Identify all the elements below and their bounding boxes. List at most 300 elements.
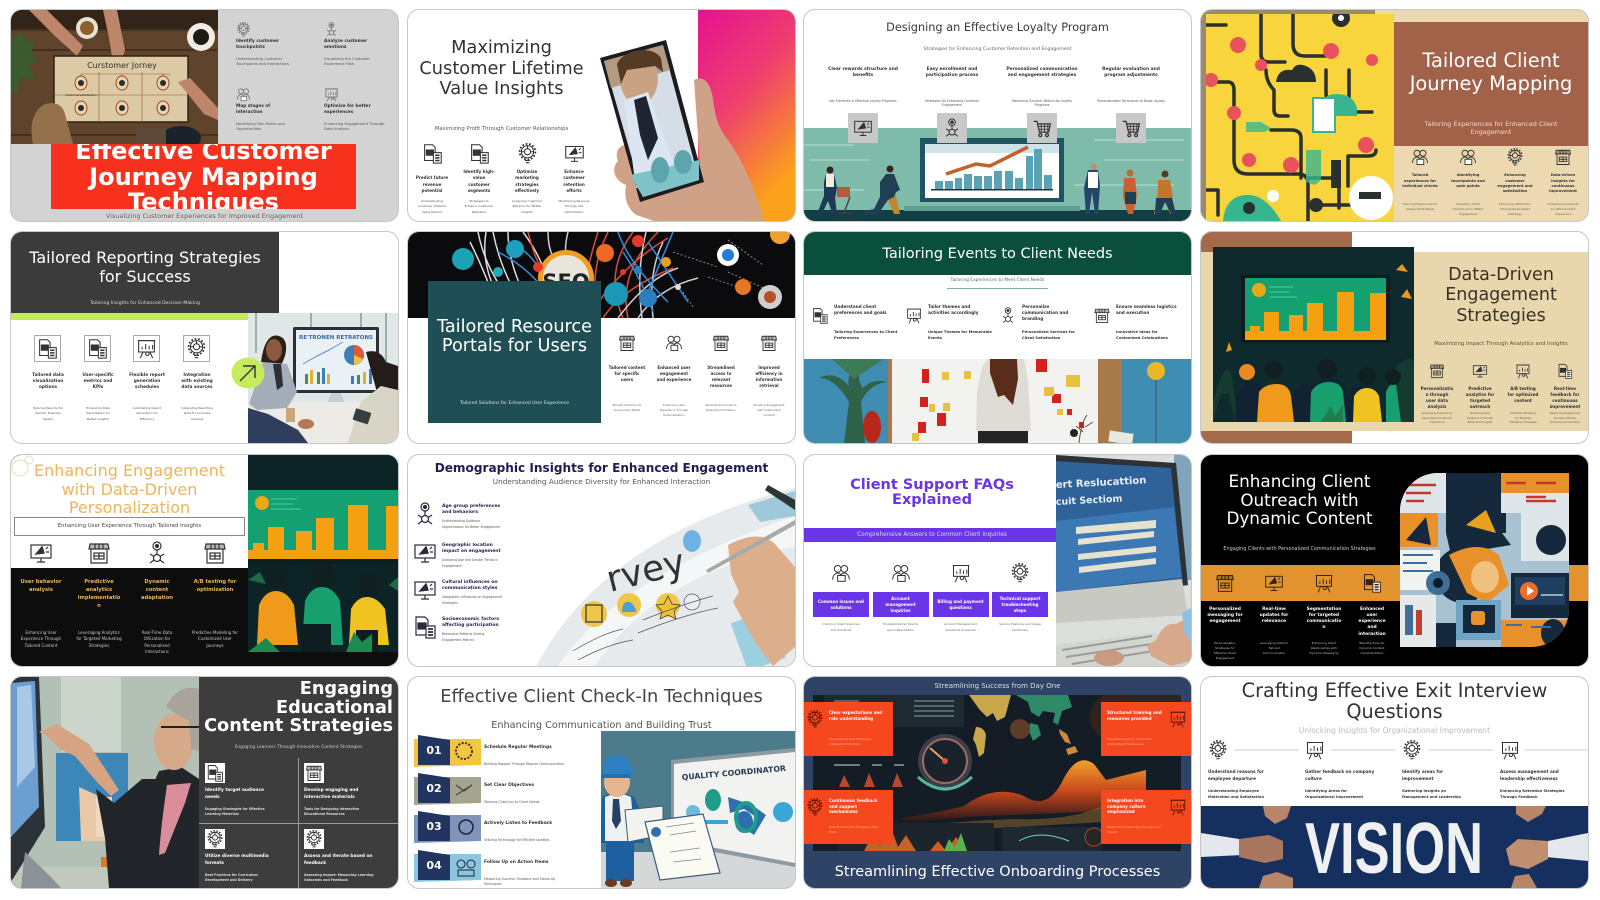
item: metrics: User-specific (82, 373, 114, 378)
item: billing: Billing and payment (937, 598, 984, 604)
grid divider horizontal (199, 822, 398, 825)
item: emotions (324, 22, 370, 66)
item: expectations (804, 702, 893, 756)
item: A/B testing: Journeys (206, 643, 224, 648)
title: with Data-Driven (62, 480, 197, 498)
item: themes: Unique Themes for Memorable (928, 330, 992, 334)
item: stages (236, 88, 285, 131)
item: improvement areas: improvement (1402, 776, 1434, 780)
item: real-time (1251, 573, 1297, 663)
item: rewards: benefits (853, 73, 873, 78)
item: satisfaction (1497, 148, 1533, 216)
item: predictive: Behavioral Insights (1468, 421, 1492, 424)
item: improvement: continuous (1552, 184, 1574, 188)
panel: data-driven personalization slide (11, 455, 398, 666)
item: A/B testing: Predictive Modeling (1510, 412, 1536, 415)
item: optimize: Optimize for better (324, 104, 371, 109)
subtitle: Strategies for Enhancing Customer Retention and Engagement (924, 47, 1072, 52)
item: training: Structured training and (1107, 710, 1162, 715)
item: communication: Personalized communication (1006, 67, 1078, 72)
item: metrics (82, 335, 114, 421)
item: visualization: Needs (43, 417, 53, 421)
item: predictive analytics: Leveraging Analytics (78, 630, 120, 635)
item: engagement (656, 336, 692, 416)
subtitle band (804, 528, 1056, 542)
item: enrollment: Easy enrollment and (927, 67, 977, 72)
item: themes: activities accordingly (928, 310, 978, 315)
item: leadership: Enhancing Retention Strategies (1500, 789, 1564, 793)
item: leadership: leadership effectiveness (1500, 776, 1558, 780)
item: dynamic content (129, 541, 185, 659)
item: optimize: experiences (324, 110, 353, 115)
item: account management: management (885, 602, 916, 606)
item: access (705, 336, 737, 412)
item: predictive (1458, 363, 1502, 438)
item: age groups: Age group preferences (442, 504, 500, 509)
title: Client Support FAQs (850, 476, 1014, 492)
panel: customer lifetime value slide (408, 10, 795, 221)
item: behavior analysis: analysis (29, 587, 53, 593)
photo: support section on computer monitor: ert Reslucattion (1056, 475, 1147, 491)
photo: quality coordinator figure with certificates (601, 731, 795, 888)
item: improvement areas (1402, 740, 1490, 800)
item: segmentation (1301, 573, 1347, 663)
item: continuous feedback: Hires (829, 830, 837, 834)
item: geographic: Analyzing Age and Gender Trends in (442, 558, 498, 562)
item: 04 action items: Measuring Success: Feedback and Follow-Up (484, 877, 555, 881)
item: interactive materials: interactive materials (304, 795, 355, 800)
item: metrics: Enhancing Data (86, 406, 110, 410)
item: culture feedback: Identifying Areas for (1305, 789, 1347, 793)
title: for Success (99, 266, 191, 286)
item: real-time: updates for (1260, 613, 1288, 618)
item: experience (1349, 573, 1395, 663)
item: socioeconomic: Engagement Metrics (442, 638, 474, 642)
title band: Tailoring Events to Client Needs (882, 246, 1113, 262)
item: communication: Programs (1035, 103, 1049, 107)
title: Tailored Resource (437, 317, 592, 337)
item: emotions: Experience Flow (324, 62, 354, 66)
item: behavior analysis: User behavior (21, 579, 61, 585)
item: marketing: Behavior for Better (513, 204, 541, 208)
title: Engaging (300, 679, 393, 699)
item: goals: Tailoring Experiences to Client (834, 330, 897, 334)
panel: tailored reporting slide (11, 232, 398, 443)
title band (804, 232, 1191, 275)
item: touchpoints: Identifying (1457, 173, 1479, 177)
left strip (1201, 10, 1206, 221)
item: satisfaction: Pathways (1508, 212, 1522, 216)
item: integration: data sources (181, 385, 213, 390)
item: stages: Map stages of (236, 104, 270, 109)
item: predictive: outreach (1470, 404, 1490, 409)
item: touchpoints (1451, 150, 1485, 216)
item: efficiency (754, 336, 784, 416)
item: age groups: and behaviors (442, 510, 478, 515)
item: logistics: Ensure seamless logistics (1116, 304, 1177, 309)
item: culture feedback: Organizational Improvement (1305, 795, 1363, 799)
gradient and hand holding phone (600, 10, 795, 221)
subtitle (1424, 120, 1558, 136)
panel: onboarding processes slide (804, 677, 1191, 888)
item: technical support (992, 563, 1048, 633)
item: rewards: Clear rewards structure and (828, 67, 898, 72)
item: touchpoints: touchpoints (236, 45, 265, 50)
subtitle: Engaging Learners Through Innovative Content Strategies (235, 745, 362, 750)
item: evaluation: Personalization Techniques to Boost Loyalty (1097, 99, 1165, 103)
item: predict: revenue (423, 182, 441, 187)
item: predictive analytics: implementatio (78, 595, 120, 601)
item: feedback: Measuring Engagement (1550, 412, 1580, 415)
title (419, 37, 584, 99)
title (1408, 48, 1572, 94)
item: common issues: Common Client Inquiries (822, 622, 860, 626)
photo: customer journey board on a wooden table: Curstomer Jorney (87, 61, 157, 70)
item: stages: Identifying Pain Points and (236, 122, 285, 126)
item: messaging: Engagement (1216, 656, 1234, 660)
item: socioeconomic: Behavioral Patterns Driving (442, 632, 484, 636)
title: Dynamic Content (1226, 508, 1373, 528)
title: Tailored Client (1422, 48, 1560, 72)
illustration: audience and bar chart (248, 455, 398, 652)
item: predictive: analytics for (1466, 392, 1494, 397)
item: integration: Integrating Real-Time (181, 406, 213, 410)
item: metrics: Better Insights (87, 417, 109, 421)
item: billing (932, 563, 988, 633)
item: marketing: strategies (515, 182, 539, 187)
item: experience: interaction (1358, 632, 1386, 636)
item: common issues (813, 563, 869, 633)
item: segments: value (473, 175, 485, 180)
item: cultural: communication styles (442, 586, 497, 591)
item: target audience: needs (205, 795, 220, 800)
item: satisfaction: engagement and (1497, 184, 1533, 188)
item: behavior analysis (13, 541, 69, 659)
title: Portals for Users (442, 336, 587, 356)
title: Tailored Reporting Strategies (29, 248, 261, 267)
item: technical support: Service Features and Usage (999, 622, 1041, 626)
item: interactive materials (304, 763, 394, 817)
item: evaluation: program adjustments (1104, 73, 1158, 78)
item: enrollment (925, 66, 980, 143)
subtitle: Visualizing Customer Experiences for Improved Engagement (106, 212, 303, 220)
item: 04 action items: Follow Up on Action Items (484, 860, 549, 864)
item: A/B testing: content (1514, 398, 1532, 403)
item: logistics: and execution (1116, 310, 1149, 315)
item: account management: inquiries (890, 608, 911, 612)
item: personalization: Personalizatio (1421, 386, 1453, 391)
item: logistics: Innovative Ideas for (1116, 330, 1158, 334)
item: multimedia: Best Practices for Curriculum (205, 872, 258, 876)
item: emotions: Visualizing the Customer (324, 57, 370, 61)
title: Data-Driven (1448, 264, 1554, 284)
panel: loyalty program slide (804, 10, 1191, 221)
item: interactive materials: Educational Resources (304, 812, 345, 816)
item: 03 feedback: 03 (426, 820, 442, 833)
item: satisfaction: Enhancing (1504, 173, 1526, 177)
item: content: Unique User Needs (614, 408, 640, 412)
title: Demographic Insights for Enhanced Engagement (435, 461, 768, 475)
item: culture (1101, 790, 1191, 844)
item: socioeconomic: Socioeconomic factors (442, 617, 499, 622)
item: engagement: Experience Through (660, 408, 688, 412)
title banner (51, 144, 356, 209)
item: schedules: Flexible report (129, 373, 165, 378)
grid divider vertical (297, 758, 300, 888)
item: billing: Account Management (944, 622, 977, 626)
brown accent bottom (1201, 431, 1352, 443)
title (29, 248, 261, 286)
item: goals: Understand client (834, 304, 876, 309)
panel: client support FAQs slide (804, 455, 1191, 666)
item: geographic (413, 541, 508, 583)
illustration: dynamic content collage (1400, 473, 1569, 647)
panel: resource portals slide (408, 232, 795, 443)
item: content: Tailored content (609, 365, 645, 370)
item: predict: Value Metrics (422, 210, 442, 214)
item: retention: efforts (566, 188, 582, 193)
item: engagement: engagement (660, 371, 688, 376)
item: tailored experiences: Tailoring Experiences for (1403, 202, 1437, 206)
item: feedback: feedback for (1550, 392, 1580, 397)
subtitle: Tailored Solutions for Enhanced User Experience (460, 401, 569, 406)
photo: colleagues reviewing dashboard (248, 313, 398, 443)
panel: demographic insights slide (408, 455, 795, 666)
item: segmentation: Relationships with (1311, 646, 1337, 650)
item: integration (181, 335, 213, 421)
item: dynamic content: Utilization for (144, 636, 170, 641)
item: predict: Understanding (421, 199, 443, 203)
item: technical support: steps (1014, 608, 1026, 612)
title (1414, 264, 1588, 326)
item: segments: Identify high- (463, 169, 495, 174)
item: improvement areas: Gathering Insights on (1402, 789, 1446, 793)
item: retention: Enhance (564, 169, 584, 174)
item: visualization: Tailoring Reports for (33, 406, 63, 410)
title: Outreach with (1240, 490, 1359, 510)
item: leadership: Through Feedback (1500, 795, 1537, 799)
item: themes: Tailor themes and (928, 304, 970, 309)
item: cultural: Cultural influences on (442, 580, 498, 585)
item: technical support: Guidelines (1012, 628, 1028, 632)
item: evaluation: Regular evaluation and (1102, 67, 1160, 72)
item: retention: retention (563, 182, 585, 187)
item: experience: Implementation (1361, 650, 1383, 654)
item: schedules: Efficiency (140, 417, 154, 421)
panel: tailored client journey slide (1201, 10, 1588, 221)
item: predictive analytics (71, 541, 127, 659)
item: messaging: Personalized (1209, 607, 1241, 612)
item: improvement: for Optimal Client (1551, 206, 1575, 210)
item: real-time: Tailored (1268, 646, 1280, 650)
item: content: for specific (615, 371, 639, 376)
item: 03 feedback (408, 811, 598, 843)
item: touchpoints: Visualizing Client (1456, 202, 1480, 206)
item: geographic: Engagement (442, 564, 462, 568)
title banner: Journey Mapping (89, 162, 318, 190)
item: schedules: Automating Report (133, 406, 161, 410)
item: experience: Dynamic Content (1359, 646, 1385, 650)
panel: customer journey mapping slide (11, 10, 398, 221)
item: socioeconomic: affecting participation (442, 623, 499, 628)
item: segments: customer (468, 182, 490, 187)
item: real-time: Real-time (1262, 607, 1286, 612)
item: common issues: Common issues and (818, 598, 864, 604)
item: real-time: relevance (1262, 619, 1286, 624)
item: culture: Impact (1107, 830, 1117, 834)
item: tailored experiences: individual clients (1402, 184, 1438, 188)
white upper area (11, 455, 248, 568)
item: touchpoints: touchpoints and (1451, 179, 1485, 183)
title (1201, 681, 1588, 722)
item: retention (558, 146, 590, 214)
item: segments: Enhance Customer (465, 204, 493, 208)
item: improvement: Experience (1555, 212, 1571, 216)
item: feedback: Assessing Impact: Measuring Learning (304, 872, 374, 876)
item: marketing: Insights (521, 210, 533, 214)
item: technical support: troubleshooting (1001, 602, 1038, 606)
item: feedback: Assess and iterate based on (304, 854, 372, 859)
item: segmentation: for targeted (1309, 613, 1339, 618)
title: Effective Client Check-In Techniques (440, 686, 763, 707)
item: touchpoints: Interactions for Better (1453, 206, 1483, 210)
item: personalization (1415, 363, 1459, 438)
item: metrics: metrics and (84, 379, 112, 384)
title: Designing an Effective Loyalty Program (886, 21, 1109, 34)
panel: client check-in slide (408, 677, 795, 888)
item: dynamic content: Real-Time Data (142, 630, 172, 635)
item: expectations: Clear expectations and (829, 710, 882, 715)
title: Maximizing (451, 37, 552, 58)
illustration: yellow journey map with winding paths (1206, 14, 1394, 221)
item: access: relevant (712, 377, 730, 382)
item: improvement areas: Management and Leadership (1402, 795, 1461, 799)
photo: hand filling in survey (533, 485, 795, 666)
item: visualization: options (39, 385, 57, 390)
item: segments: Strategies to (469, 199, 489, 203)
item: geographic: Geographic location (442, 543, 493, 548)
item: culture feedback: culture (1305, 776, 1322, 780)
item: marketing: Optimize (517, 169, 537, 174)
item: A/B testing: A/B testing for (194, 579, 236, 585)
item: predictive analytics: Predictive (84, 579, 114, 585)
item: interactive materials: Tools for Designing Interactive (304, 806, 359, 810)
subtitle (947, 277, 1048, 289)
item: emotions: emotions (324, 45, 346, 50)
photo: quality coordinator figure with certificates: QUALITY COORDINATOR (681, 764, 786, 782)
item: logistics (1094, 304, 1177, 340)
item: experience: Enhanced (1360, 607, 1384, 612)
decorative outline circles (11, 455, 41, 479)
item: dynamic content: Dynamic (144, 579, 170, 585)
item: continuous feedback: mechanisms (829, 809, 858, 814)
item: touchpoints: pain points (1456, 184, 1480, 188)
timeline connector (1201, 749, 1588, 751)
item: schedules (129, 335, 165, 421)
photo: VISION letters with hands (1201, 806, 1588, 888)
item: real-time: Leveraging Data for (1260, 640, 1288, 644)
item: branding: Personalized Services for (1022, 330, 1075, 334)
item: marketing (512, 143, 542, 214)
item: satisfaction: Through Personalized (1500, 206, 1530, 210)
panel: exit interview slide (1201, 677, 1588, 888)
title (1201, 472, 1398, 528)
item: cultural: Geographic Influences on Engagement (442, 595, 502, 599)
item: optimize (324, 88, 384, 131)
subtitle: Enhancing Communication and Building Trust (491, 720, 712, 730)
item: communication: and engagement strategies (1008, 73, 1076, 78)
item: messaging: Strategies for (1215, 646, 1235, 650)
item: departure reasons: Understand reasons for (1208, 768, 1264, 774)
item: messaging: messaging for (1207, 613, 1243, 618)
item: satisfaction: customer (1505, 179, 1525, 183)
item: integration: Integration (183, 373, 211, 378)
item: geographic: impact on engagement (442, 549, 501, 554)
item: A/B testing: for Targeted (1515, 417, 1531, 420)
item: engagement: Enhancing User (663, 402, 685, 406)
item: personalization: n through (1426, 392, 1448, 397)
item: predictive analytics: n (97, 603, 101, 609)
item: schedules: generation (134, 379, 160, 384)
item: multimedia: formats (205, 861, 224, 866)
subtitle: Understanding Audience Diversity for Enhanced Interaction (493, 477, 710, 486)
item: behavior analysis: Enhancing User (25, 630, 57, 635)
item: access: resources (710, 383, 732, 388)
item: metrics: Visualization for (86, 411, 110, 415)
item: A/B testing: Marketing Strategies (1510, 421, 1536, 424)
photo: colleagues reviewing dashboard: RE'TRONEN RETRATONS (299, 335, 373, 341)
item: integration: with existing (181, 379, 213, 384)
item: personalization: analysis (1428, 404, 1446, 409)
title (199, 680, 393, 736)
item: dynamic content: Interactions (145, 649, 169, 654)
item: evaluation (1097, 66, 1165, 143)
item: improvement (1547, 150, 1579, 216)
item: 02 objectives: Set Clear Objectives (484, 782, 534, 788)
item: expectations: role understanding (829, 716, 873, 721)
item: expectations: Integration Practices (829, 742, 860, 746)
item: personalization: Leveraging Analytics for (1421, 412, 1453, 415)
item: predictive: Enhancing User (1470, 412, 1490, 415)
item: target audience: Engaging Strategies for Effective (205, 806, 265, 810)
item: marketing: effectively (515, 188, 539, 193)
item: target audience (205, 763, 295, 817)
item: rewards (828, 66, 898, 143)
photo: planner at wall of sticky notes (804, 359, 1191, 443)
item: messaging (1202, 573, 1248, 663)
item: training: resources provided (1107, 716, 1152, 721)
item: feedback: feedback (304, 861, 326, 866)
item: culture: company culture (1107, 804, 1146, 809)
item: training: Essential Steps for Successful (1107, 737, 1152, 741)
item: socioeconomic (413, 615, 508, 657)
item: content (608, 336, 646, 412)
item: visualization: Specific Business (35, 411, 61, 415)
item: emotions: Analyze customer (324, 39, 367, 44)
cream background panel (1201, 252, 1588, 431)
subtitle: Maximizing Profit Through Customer Relationships (435, 126, 568, 132)
item: retention: customer (563, 175, 585, 180)
title: Engagement (1445, 285, 1557, 305)
item: branding: communication and (1022, 310, 1068, 315)
item: age groups (413, 502, 508, 544)
item: improvement: improvement (1549, 189, 1577, 193)
item: real-time: Communication (1263, 650, 1285, 654)
photo: SEO network on black background (408, 232, 795, 318)
item: A/B testing: for optimized (1508, 392, 1538, 397)
item: 03 feedback: Utilizing Technology for Efficient Updates (484, 838, 549, 842)
item: A/B testing: Predictive Modeling for (192, 630, 238, 635)
